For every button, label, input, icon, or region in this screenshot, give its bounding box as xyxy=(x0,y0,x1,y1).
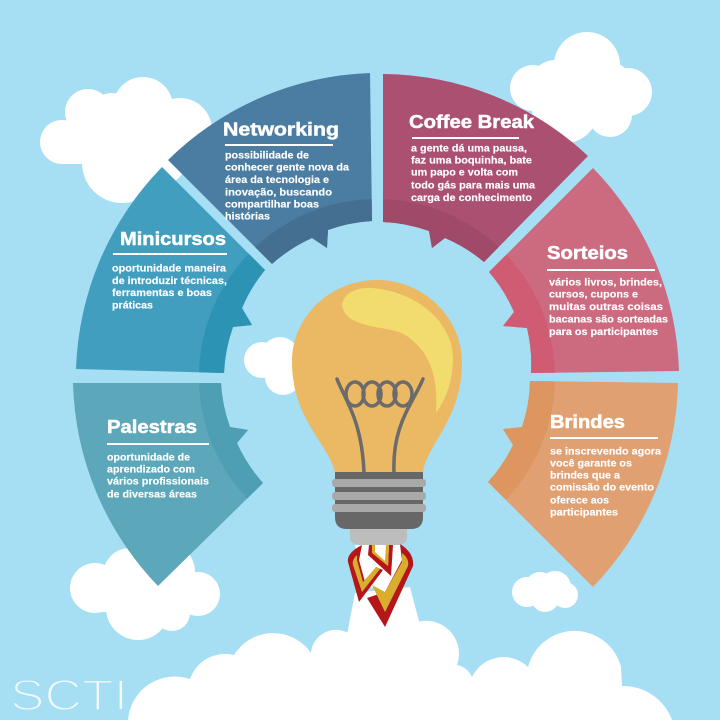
text: Brindes description: brindes que a xyxy=(550,470,620,482)
text: Coffee Break description: todo gás para mais uma xyxy=(411,180,535,192)
cloud: bottom large xyxy=(128,621,672,720)
text: Minicursos description: de introduzir técnicas, xyxy=(112,276,227,287)
text: Sorteios description: cursos, cupons e xyxy=(549,290,638,300)
text: Palestras description: oportunidade de xyxy=(107,452,190,464)
panel: Coffee Break xyxy=(383,74,588,262)
text: Networking description: área da tecnologia e xyxy=(225,175,329,186)
text: Brindes description: você garante os xyxy=(550,458,632,470)
panel: Brindes xyxy=(488,381,678,587)
text: Sorteios description xyxy=(549,278,668,338)
panel: Sorteios xyxy=(489,168,679,373)
panel: Palestras xyxy=(73,383,263,586)
text: Sorteios description: muitas outras coisas xyxy=(549,302,664,313)
cloud: bottom right small xyxy=(512,571,578,612)
cloud: behind bulb xyxy=(244,337,301,395)
screw base xyxy=(332,472,426,545)
text: Coffee Break description: faz uma boquinha, bate xyxy=(411,156,532,166)
bulb glass xyxy=(292,280,462,473)
text: Brindes description: oferece aos xyxy=(550,496,609,506)
logo: SCTI: SCTI xyxy=(10,671,128,720)
text: Networking description: possibilidade de xyxy=(225,150,309,162)
heading: Coffee Break: Coffee Break xyxy=(409,112,535,132)
text: Sorteios description: vários livros, brindes, xyxy=(549,278,662,288)
heading: Palestras: Palestras xyxy=(107,417,197,437)
heading: Networking: Networking xyxy=(223,120,339,140)
text: Minicursos description: práticas xyxy=(112,300,153,312)
text: Coffee Break description: carga de conhecimento xyxy=(411,193,532,204)
panel: Minicursos xyxy=(76,167,265,373)
text: Brindes description: se inscrevendo agora xyxy=(550,446,661,458)
heading: Brindes: Brindes xyxy=(550,412,625,432)
text: Palestras description xyxy=(107,452,209,500)
bulb highlight xyxy=(342,288,453,413)
text: Coffee Break description xyxy=(411,144,535,204)
text: Minicursos description xyxy=(112,264,227,312)
text: Coffee Break description: a gente dá uma pausa, xyxy=(411,144,527,154)
text: Minicursos description: oportunidade maneira xyxy=(112,264,226,274)
text: Palestras description: aprendizado com xyxy=(107,464,195,476)
rocket trail xyxy=(346,587,424,640)
text: Palestras description: de diversas áreas xyxy=(107,490,197,500)
text: Brindes description: participantes xyxy=(550,508,618,518)
text: Networking description: inovação, buscando xyxy=(225,188,332,198)
text: Palestras description: vários profissionais xyxy=(107,476,209,488)
cloud: bottom left xyxy=(70,542,220,640)
heading: Minicursos: Minicursos xyxy=(120,229,226,249)
panel: Networking xyxy=(168,73,372,264)
text: Sorteios description: bacanas são sorteadas xyxy=(549,314,668,326)
cloud: top right xyxy=(510,32,652,143)
cloud: top left xyxy=(40,77,212,203)
filament xyxy=(337,379,423,473)
icon: light bulb xyxy=(292,280,462,545)
text: Networking description: compartilhar boas xyxy=(225,200,319,210)
text: Brindes description: comissão do evento xyxy=(550,482,654,494)
heading: Sorteios: Sorteios xyxy=(547,243,628,263)
text: Networking description xyxy=(225,150,349,222)
icon: rocket flames xyxy=(348,544,413,627)
text: Minicursos description: ferramentas e boas xyxy=(112,288,212,299)
text: Coffee Break description: um papo e volta com xyxy=(411,168,518,178)
text: Sorteios description: para os participantes xyxy=(549,327,658,338)
text: Networking description: histórias xyxy=(225,212,270,222)
text: Networking description: conhecer gente nova da xyxy=(225,162,349,174)
text: Brindes description xyxy=(550,446,661,518)
